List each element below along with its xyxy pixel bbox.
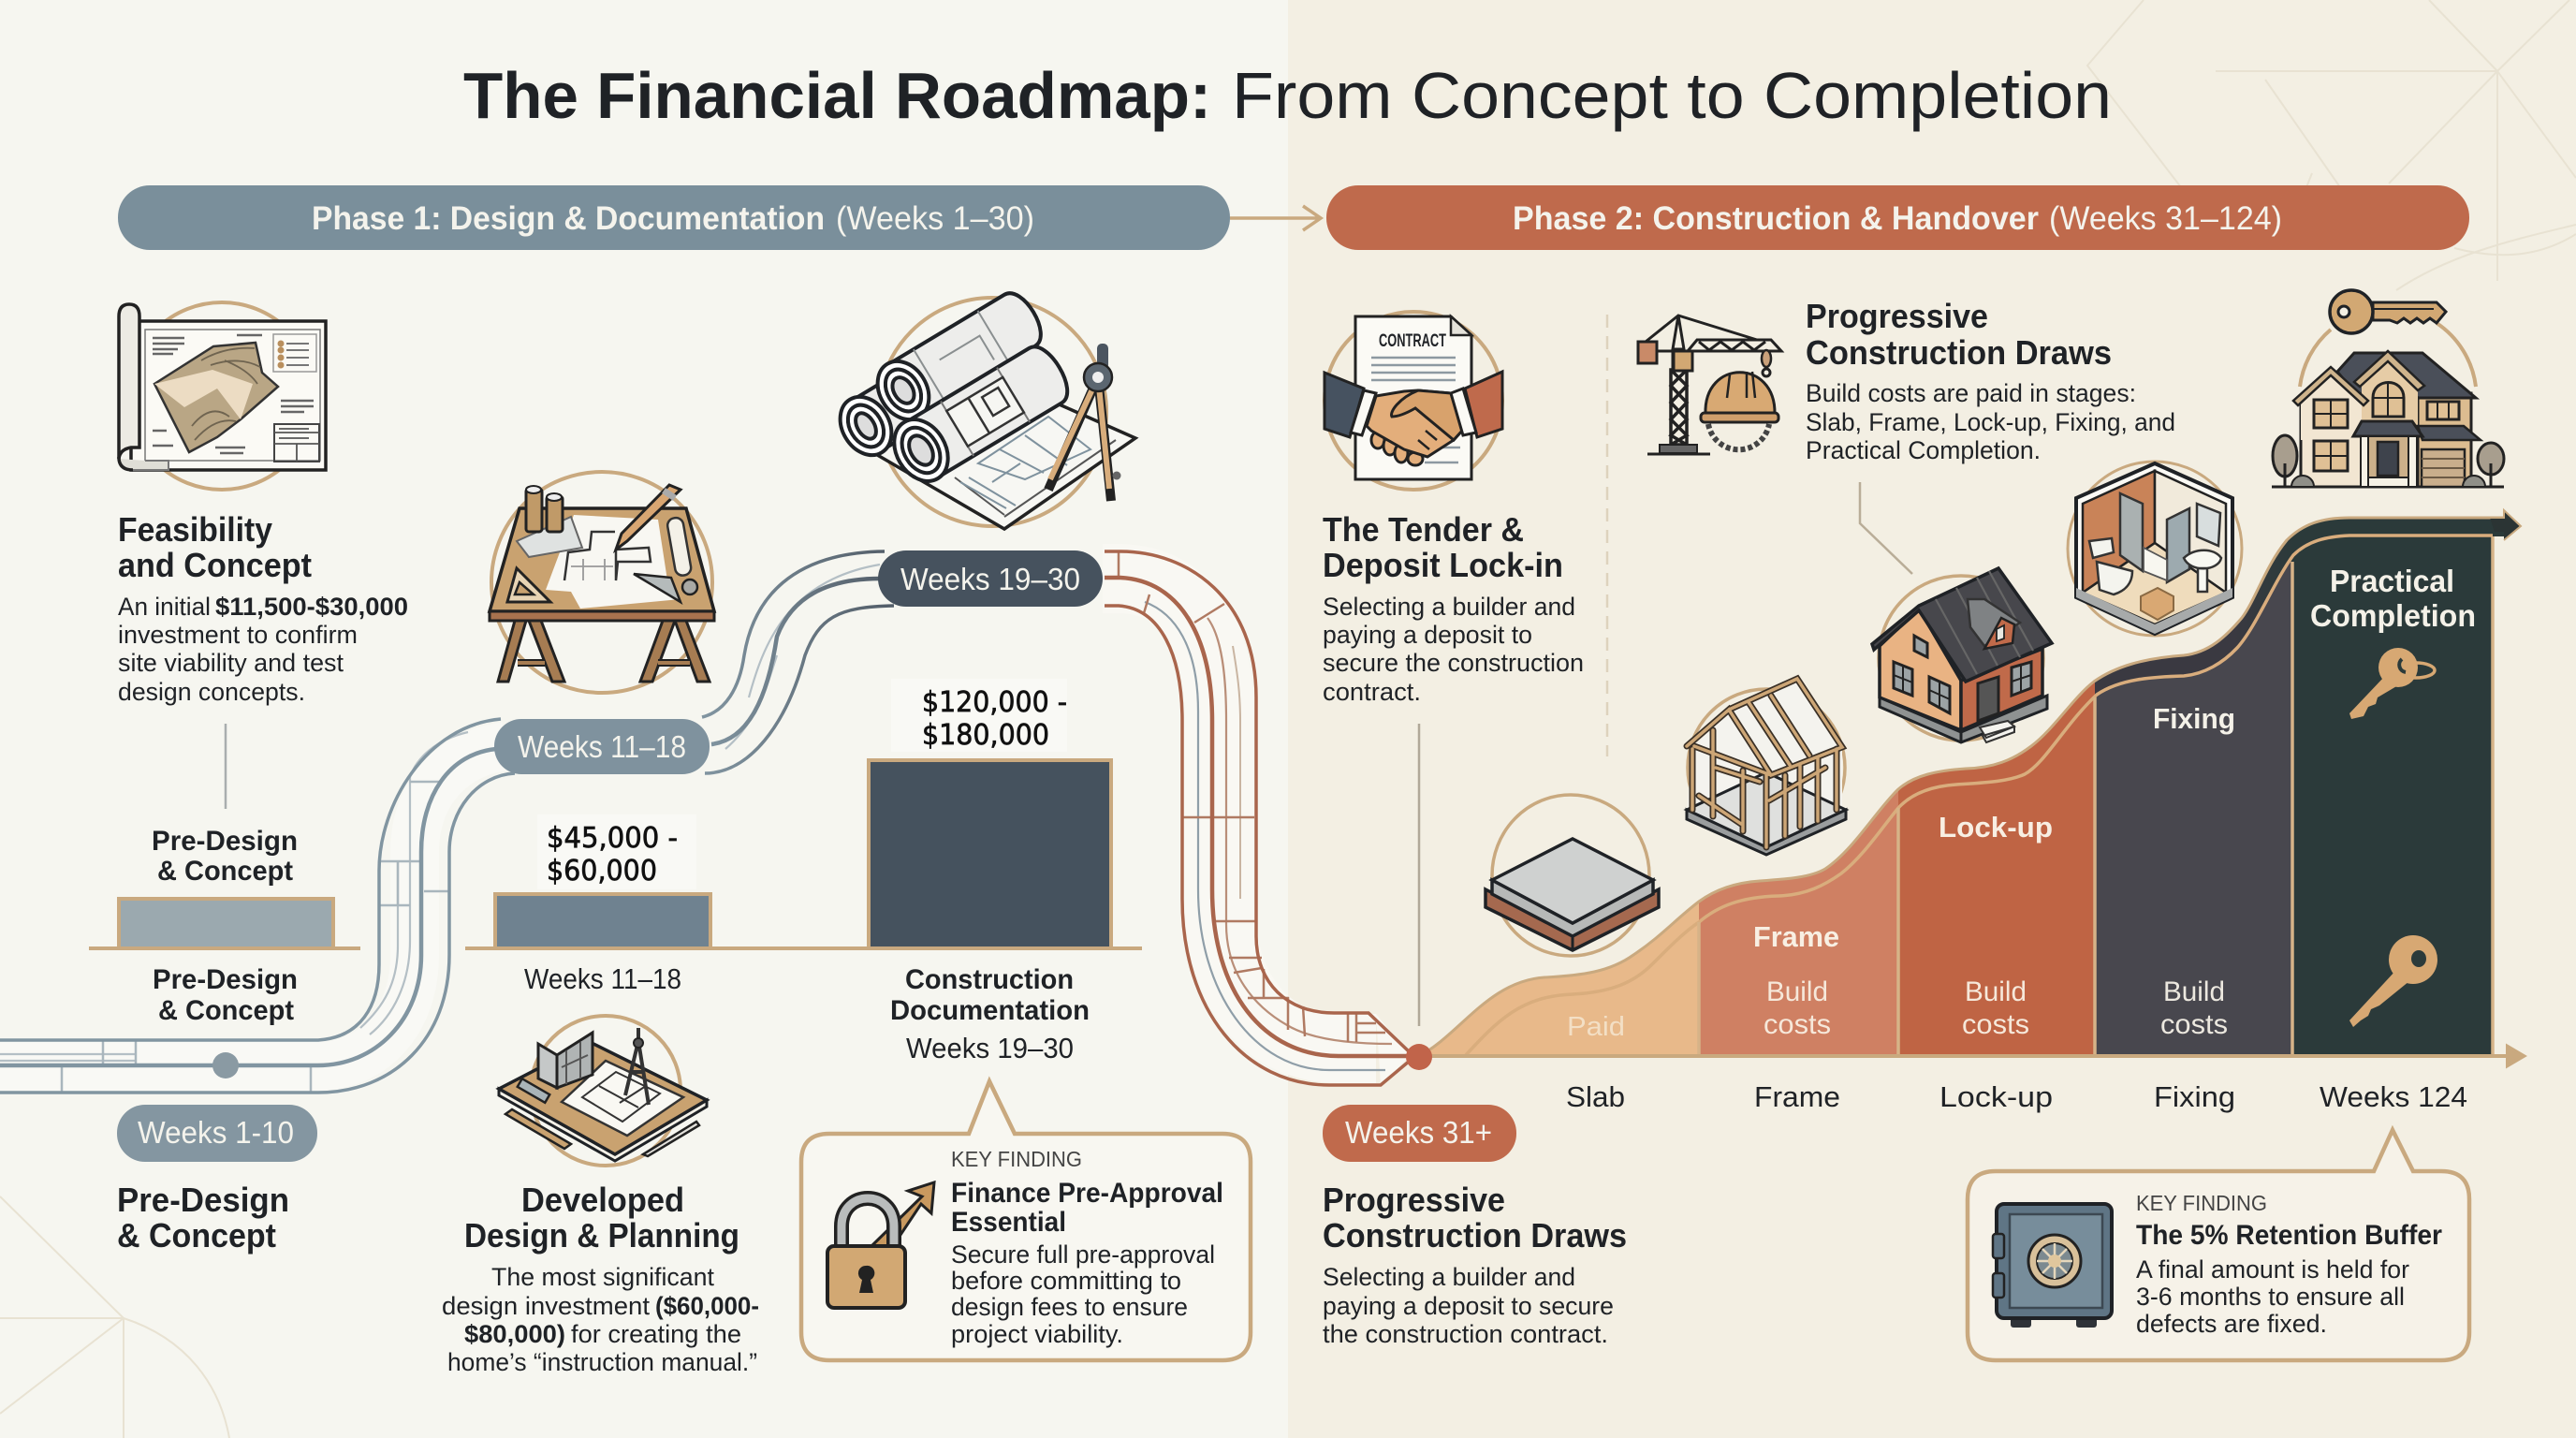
chart: pre-design cost bar: Pre-Design [152,826,298,857]
heading: progressive construction draws top: Progressive [1806,297,1988,335]
icon: contract and handshake [1325,312,1502,490]
text: tender body: contract. [1323,678,1421,706]
heading: feasibility: and Concept [118,546,312,584]
callout: finance pre-approval: Secure full pre-approval [951,1240,1215,1269]
background: left half [0,0,1288,1438]
node [1406,1044,1432,1070]
icon: contract and handshake: CONTRACT [1379,331,1446,351]
text: feasibility body [118,593,408,706]
pill: weeks 31+: Weeks 31+ [1345,1115,1492,1150]
callout: finance pre-approval [801,1081,1251,1360]
arrow: phase 1 to phase 2 [1230,206,1321,230]
icon: timber frame [1687,679,1846,855]
heading: progressive draws lower: Progressive [1323,1181,1505,1219]
text: feasibility body: site viability and test [118,649,344,677]
icon: padlock with arrow [827,1182,934,1308]
leader line: draws [1860,482,1912,574]
chart: developed design and documentation cost bars: Weeks 11–18 [524,962,681,995]
callout: finance pre-approval: KEY FINDING [951,1147,1082,1171]
icon: desk with plans [499,1016,707,1166]
text: feasibility body: An initial [118,593,211,621]
chart: stepped construction draws: costs [1962,1009,2029,1040]
heading: progressive draws lower: Construction Draws [1323,1216,1627,1255]
text: draws body: Practical Completion. [1806,436,2041,464]
chart: stepped construction draws: costs [2160,1009,2228,1040]
text: tender body: secure the construction [1323,649,1584,677]
heading: tender and deposit [1323,510,1563,584]
callout: retention buffer: A final amount is held for [2136,1255,2409,1284]
heading: developed design: Developed [521,1181,684,1219]
chart: developed design and documentation cost bars: Construction [905,964,1074,995]
heading: tender and deposit: Deposit Lock-in [1323,546,1563,584]
chart: stepped construction draws: Fixing [2154,1080,2235,1113]
text: developed design body [442,1263,759,1376]
text: tender body [1323,593,1584,706]
callout: finance pre-approval: Essential [951,1207,1066,1238]
icon: drafting table [490,472,714,693]
icon: tower crane and hard hat [1638,315,1781,454]
leader line: tender to node [1418,724,1420,1026]
chart: stepped construction draws: Paid [1567,1012,1625,1042]
chart: developed design and documentation cost bars: $180,000 [922,719,1049,752]
heading: tender and deposit: The Tender & [1323,510,1524,549]
callout: retention buffer [1968,1130,2469,1360]
text: progressive draws body [1323,1263,1614,1348]
chart: stepped construction draws: Slab [1566,1080,1625,1113]
pill: weeks 19-30 [878,550,1103,607]
title [463,59,2112,132]
chart: developed design and documentation cost bars: $60,000 [547,855,657,888]
text: tender body: Selecting a builder and [1323,593,1575,621]
roadmap path [0,551,1410,1093]
chart: stepped construction draws: Lock-up [1939,811,2053,844]
chart: stepped construction draws: Frame [1753,920,1839,953]
heading: feasibility [118,510,312,584]
callout: retention buffer: The 5% Retention Buffer [2136,1220,2442,1251]
phase 2 banner: (Weeks 31–124) [2049,200,2282,237]
text: tender body: paying a deposit to [1323,621,1532,649]
chart: stepped construction draws: Build [2163,976,2225,1007]
chart: stepped construction draws: Build [1766,976,1828,1007]
icon: locked-up house [1872,568,2052,742]
text: draws body [1806,379,2175,464]
chart: pre-design cost bar: & Concept [157,856,293,887]
heading: feasibility: Feasibility [118,510,272,549]
callout: finance pre-approval: Finance Pre-Approval [951,1178,1223,1209]
chart: developed design and documentation cost bars: $120,000 - [922,686,1067,719]
chart: stepped construction draws [1406,468,2524,1113]
icon: concrete slab [1486,795,1659,956]
text: developed design body: The most significant [491,1263,714,1291]
heading: pre-design and concept: & Concept [117,1216,276,1255]
heading: developed design [464,1181,739,1255]
pill: weeks 31+ [1323,1105,1516,1162]
chart: stepped construction draws: Fixing [2153,702,2235,735]
heading: progressive draws lower [1323,1181,1627,1255]
chart: stepped construction draws: Lock-up [1939,1080,2053,1113]
chart: pre-design cost bar [89,826,360,1026]
heading: developed design: Design & Planning [464,1216,739,1255]
icon: site plan blueprint [119,302,326,490]
icon: key on practical completion [2349,648,2435,719]
title: From Concept to Completion [1232,59,2112,132]
chart: developed design and documentation cost bars: Weeks 19–30 [906,1032,1074,1064]
callout: retention buffer: 3-6 months to ensure all [2136,1283,2405,1311]
pill: weeks 11-18 [494,719,710,774]
callout: finance pre-approval: design fees to ensure [951,1293,1188,1321]
callout: retention buffer: defects are fixed. [2136,1310,2327,1338]
chart: developed design and documentation cost bars: $45,000 - [547,822,678,855]
icon: key at base of column [2349,935,2437,1027]
callout: finance pre-approval: project viability. [951,1320,1123,1348]
text: developed design body: $80,000) [464,1320,565,1348]
icon: key above house [2330,290,2446,333]
chart: stepped construction draws: Practical [2330,564,2454,598]
path: construction phase track [1103,551,1410,1085]
heading: progressive construction draws top [1806,297,2112,372]
callout: finance pre-approval: before committing to [951,1267,1181,1295]
chart: stepped construction draws: Weeks 124 [2320,1080,2467,1113]
phase 1 banner [118,185,1230,250]
text: developed design body: home’s “instruction manual.” [447,1348,757,1376]
chart: stepped construction draws: Completion [2310,598,2476,633]
icon: finished house with key [2272,290,2504,487]
path: design phase track [0,551,894,1093]
text: feasibility body: design concepts. [118,678,305,706]
text: progressive draws body: paying a deposit to secure [1323,1292,1614,1320]
arrow: curve end [2490,510,2521,540]
phase 1 banner: (Weeks 1–30) [836,200,1034,237]
icon: safe [1993,1204,2112,1328]
chart: stepped construction draws: Frame [1754,1080,1840,1113]
text: feasibility body: investment to confirm [118,621,358,649]
text: draws body: Build costs are paid in stages: [1806,379,2136,407]
phase 2 banner [1326,185,2469,250]
text: feasibility body: $11,500-$30,000 [215,593,408,621]
chart: stepped construction draws: costs [1764,1009,1831,1040]
text: developed design body: design investment [442,1292,651,1320]
icon: bathroom fit-out [2068,462,2242,636]
chart: developed design and documentation cost bars [465,679,1142,1064]
chart: stepped construction draws: Build [1965,976,2027,1007]
chart: pre-design cost bar: & Concept [158,995,294,1026]
chart: pre-design cost bar: Pre-Design [153,964,298,995]
pill: weeks 11-18: Weeks 11–18 [518,729,686,764]
callout: retention buffer: KEY FINDING [2136,1191,2267,1215]
pill: weeks 1-10: Weeks 1-10 [138,1115,294,1150]
text: progressive draws body: Selecting a builder and [1323,1263,1575,1291]
text: developed design body: ($60,000- [655,1292,759,1320]
heading: pre-design and concept [117,1181,289,1255]
phase 1 banner: Phase 1: Design & Documentation [312,200,825,237]
pill: weeks 19-30: Weeks 19–30 [900,562,1080,596]
chart: developed design and documentation cost bars: Documentation [890,995,1090,1026]
phase 2 banner: Phase 2: Construction & Handover [1513,200,2039,237]
heading: progressive construction draws top: Construction Draws [1806,333,2112,372]
pill: weeks 1-10 [117,1105,317,1162]
leader line: feasibility [225,724,227,809]
text: draws body: Slab, Frame, Lock-up, Fixing, and [1806,408,2175,436]
icon: rolled plans and compass [830,286,1135,529]
text: developed design body: for creating the [571,1320,741,1348]
text: progressive draws body: the construction contract. [1323,1320,1608,1348]
background: right half [1288,0,2576,1438]
start node [212,1052,239,1078]
title: The Financial Roadmap: [463,59,1211,132]
axis arrow [1419,1047,2524,1065]
heading: pre-design and concept: Pre-Design [117,1181,289,1219]
